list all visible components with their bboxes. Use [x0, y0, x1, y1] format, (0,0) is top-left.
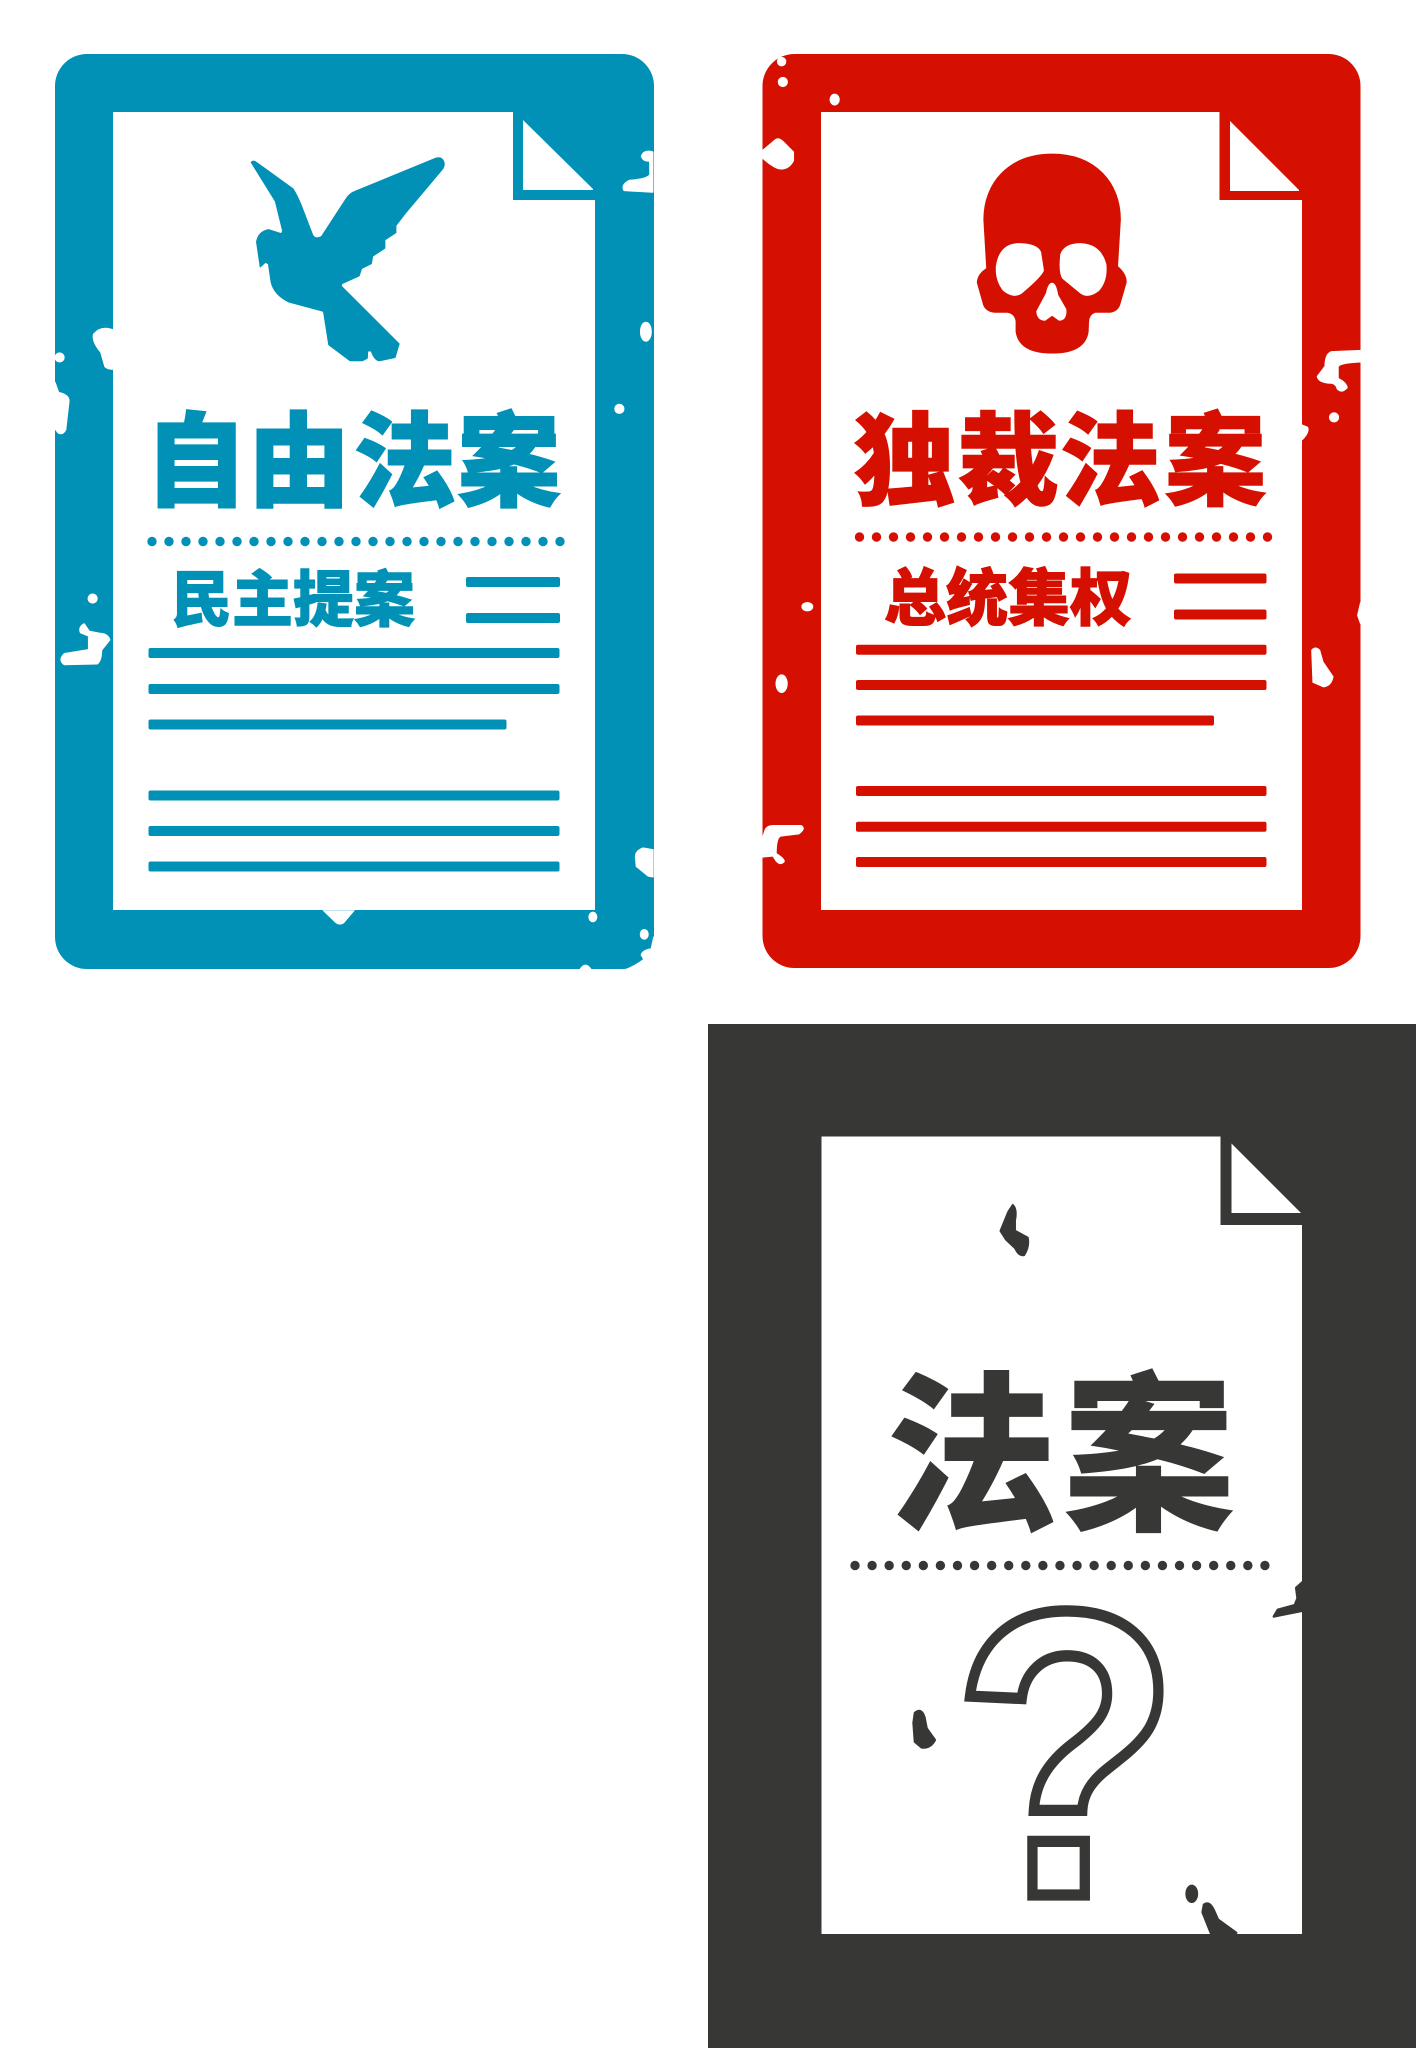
dotted divider	[860, 532, 1268, 542]
worn white marks	[55, 152, 652, 664]
subtitle: democratic proposal: 民主提案	[171, 550, 415, 639]
card background	[762, 54, 1360, 968]
title: dictatorship bill: 独裁法案	[854, 381, 1266, 527]
dotted divider	[855, 1561, 1266, 1570]
text lines	[856, 574, 1266, 867]
icon: outlined question mark: ?	[953, 1526, 1180, 1982]
icon: dove	[251, 158, 444, 361]
panel: unknown bill (dark)	[708, 1024, 1416, 2048]
subtitle: concentrated presidential power: 总统集权	[884, 548, 1132, 638]
dotted divider	[152, 537, 561, 546]
title: bill: 法案	[886, 1317, 1235, 1567]
folded corner	[523, 120, 593, 190]
worn dark marks	[913, 1205, 1302, 1933]
worn white marks	[761, 58, 1361, 623]
folded corner	[1232, 1144, 1301, 1213]
icon: skull	[977, 154, 1126, 353]
card background	[55, 54, 654, 969]
paper sheet	[822, 1136, 1302, 1934]
card background	[708, 1024, 1416, 2048]
panel: liberty bill (blue)	[55, 54, 656, 970]
paper sheet	[821, 112, 1302, 910]
text lines	[148, 577, 560, 872]
panel: dictatorship bill (red)	[761, 54, 1361, 968]
paper sheet	[113, 112, 595, 910]
folded corner	[1230, 121, 1299, 191]
title: liberty bill: 自由法案	[145, 381, 560, 528]
